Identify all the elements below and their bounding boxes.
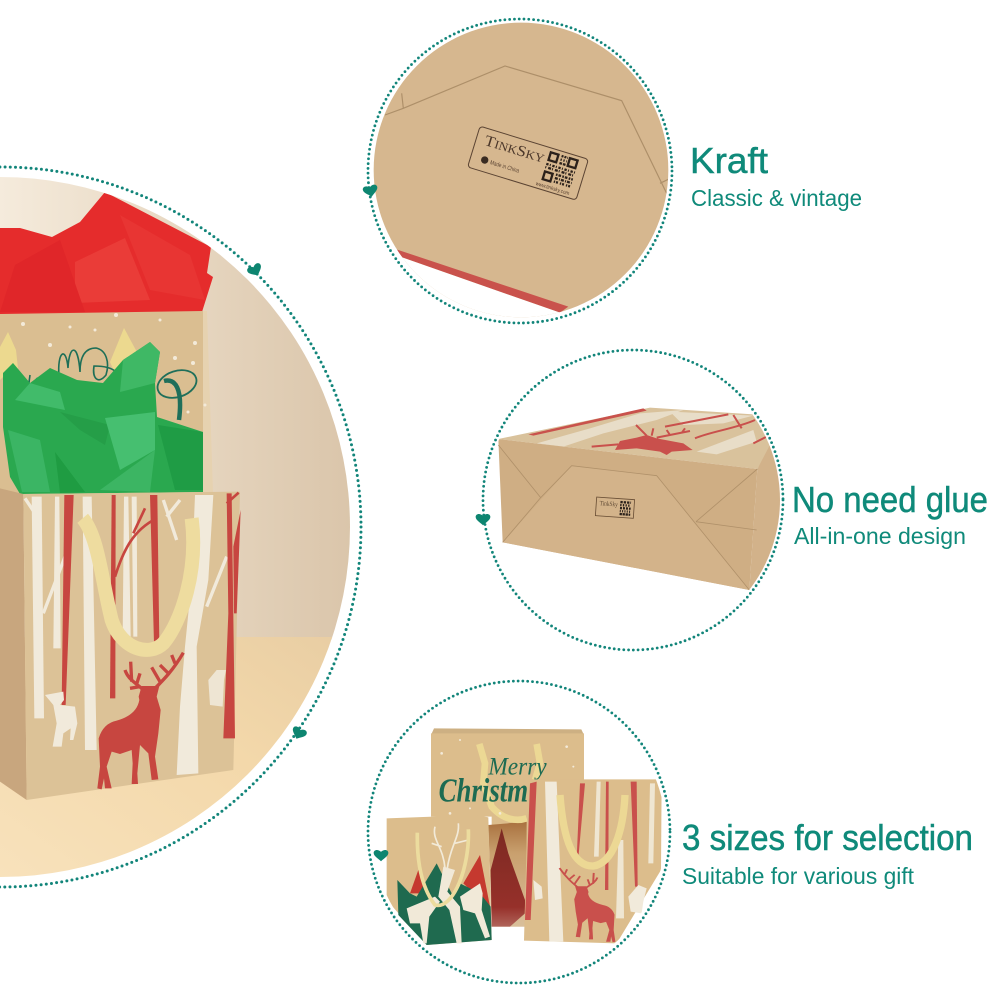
website: www.tinksky.com [535, 181, 570, 197]
subheading: Classic & vintage: Classic & vintage [691, 185, 862, 211]
origin text: Made in China [489, 160, 520, 175]
white deer left [45, 692, 77, 747]
printed tree backdrop [488, 822, 527, 927]
Merry text: Merry [487, 752, 547, 780]
red print strip [393, 248, 568, 313]
red tree trunks [62, 493, 241, 738]
red tree [463, 855, 491, 910]
heading: 3 sizes for selection: 3 sizes for selection [682, 817, 973, 858]
bag right side [750, 446, 780, 590]
dotted ring: sizes [368, 681, 670, 983]
icon: heart on main ring lower [290, 725, 308, 742]
small bag with green trees and white deer [387, 815, 492, 945]
green calligraphy strokes [28, 347, 114, 383]
snow dots [440, 739, 574, 815]
white area below the strip [402, 258, 560, 318]
medium bag ribbon handle [560, 795, 625, 866]
red stag [97, 653, 183, 789]
subheading: All-in-one design: All-in-one design [794, 523, 966, 549]
bag bottom face [498, 439, 757, 590]
photo background: table [0, 637, 332, 877]
QR code [542, 152, 579, 188]
Christmas text: Christmas [439, 773, 552, 810]
small bag handle [417, 829, 468, 905]
dotted ring: kraft [368, 19, 672, 323]
bag bottom center flap [504, 542, 748, 590]
subheading: Suitable for various gift: Suitable for various gift [682, 863, 915, 889]
large green letter loop [156, 369, 198, 420]
kraft paper surface [370, 20, 673, 330]
fold lines [498, 445, 757, 590]
icon: heart on main ring upper [246, 262, 264, 279]
heading: Kraft: Kraft [690, 140, 768, 181]
large bag handles [479, 744, 540, 820]
front bag satin ribbon handle [83, 518, 193, 650]
back bag left handle [0, 332, 19, 380]
snow dots [21, 313, 206, 414]
red stag on bag top [615, 435, 693, 455]
fold lines [385, 66, 668, 193]
icon: heart on glue ring [476, 514, 490, 525]
dotted ring: main photo [0, 167, 361, 887]
panel: main photo of stacked gift bags [0, 170, 355, 887]
white birch trees [32, 495, 213, 775]
printed tree [491, 828, 525, 927]
back bag right handle [110, 328, 136, 370]
brand label [468, 126, 588, 200]
heading: No need glue: No need glue [792, 479, 988, 520]
medium bag with red stag [524, 779, 662, 943]
red tissue paper [0, 192, 213, 315]
brand label: TinkSky [599, 500, 619, 509]
icon: heart on sizes ring [374, 850, 388, 861]
white deer [628, 885, 647, 913]
recycle mark [480, 155, 489, 165]
white antlers [432, 823, 468, 868]
brand name: TINKSKY [483, 132, 547, 167]
brand label [595, 497, 635, 518]
panel: kraft paper close-up [370, 20, 673, 330]
bag top face with red print [498, 408, 772, 469]
panel: three bag sizes [387, 728, 662, 945]
photo background: wall [0, 170, 355, 640]
panel: flat bag bottom without glue [498, 408, 785, 590]
green tissue paper [3, 342, 203, 494]
large bag with Merry Christmas [431, 728, 584, 927]
white deer [438, 867, 462, 943]
QR code [620, 502, 631, 515]
red stag [559, 868, 615, 942]
back bag with Merry Christmas print [0, 311, 213, 495]
icon: heart on kraft ring [362, 184, 379, 198]
white deer right [208, 670, 226, 707]
front bag with deer print, side and face [0, 488, 241, 800]
green trees [397, 863, 492, 945]
dotted ring: no need glue [483, 350, 783, 650]
